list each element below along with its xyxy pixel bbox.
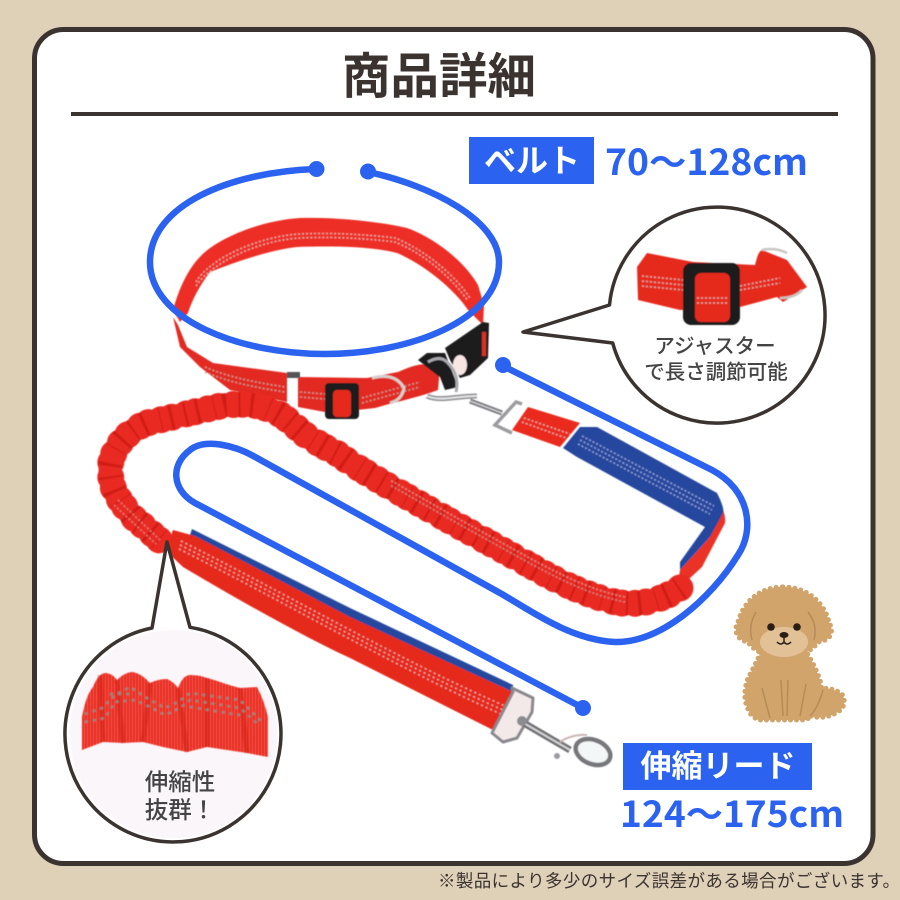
title rule (71, 112, 838, 116)
belt size label: 70〜128cm (605, 134, 808, 186)
icon: toy poodle (736, 587, 844, 720)
product photo: lower leash strap (165, 529, 614, 770)
elastic close-up photo (82, 672, 268, 757)
title: 商品詳細 (342, 37, 536, 107)
product photo: buckle and snap hook (418, 322, 522, 433)
callout: adjuster (523, 207, 825, 423)
leash outline arrow (176, 357, 747, 716)
leash size label: 伸縮リード (640, 741, 796, 786)
callout: elasticity (65, 542, 281, 842)
belt outline arrow (150, 161, 499, 354)
product photo: elastic bungee (110, 404, 680, 603)
leash size label (620, 741, 844, 838)
belt size label: ベルト (484, 136, 580, 182)
leash size label: 124〜175cm (620, 786, 844, 838)
product photo: leash handle (512, 407, 725, 590)
product photo: belt (173, 218, 484, 419)
callout: adjuster: で長さ調節可能 (644, 355, 788, 385)
adjuster photo (637, 249, 807, 325)
callout: elasticity: 抜群！ (145, 791, 215, 825)
belt size label (469, 134, 808, 186)
adjuster caption: アジャスター (654, 329, 776, 359)
footnote: ※製品により多少のサイズ誤差がある場合がございます。 (438, 868, 900, 893)
elasticity caption: 伸縮性 (145, 763, 215, 797)
